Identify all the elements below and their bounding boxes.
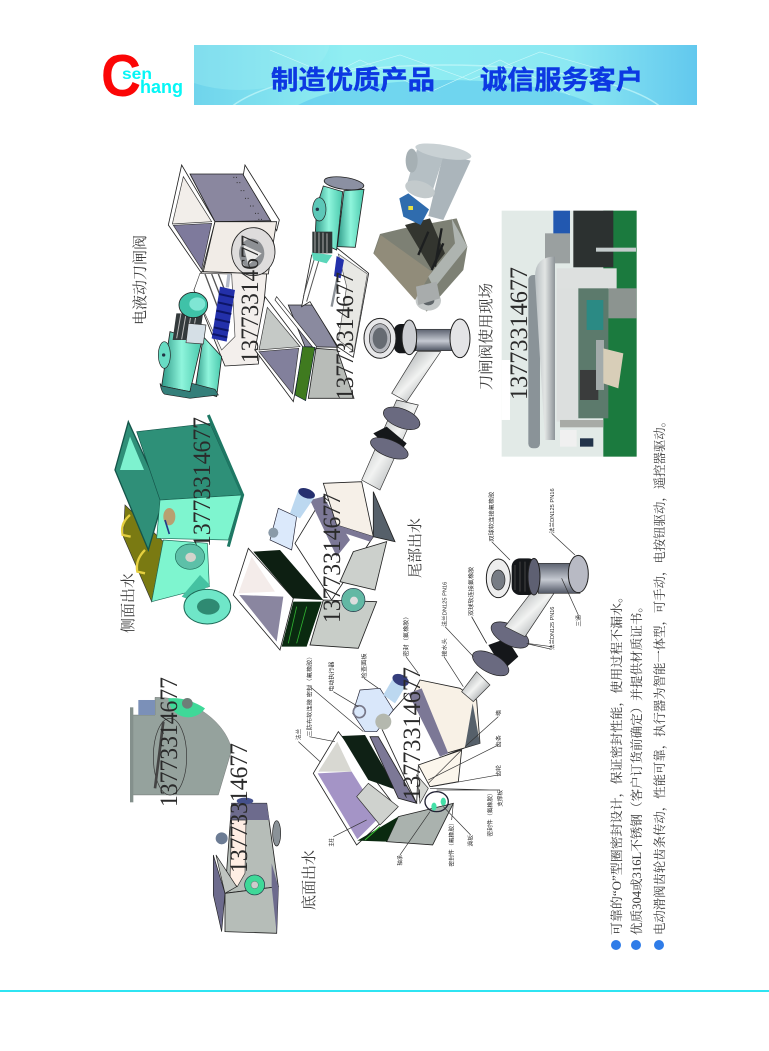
logo letter C: C bbox=[101, 43, 141, 109]
part labels: 密封件（氟橡胶） bbox=[448, 820, 456, 867]
panel: electro-hydraulic valves bbox=[158, 165, 369, 402]
panel: bottom outlet valve bbox=[130, 697, 281, 933]
phone watermarks: 13773314677 bbox=[226, 743, 253, 873]
labels: 法兰DN125 PN16 bbox=[548, 607, 556, 650]
part labels: 齿条 bbox=[494, 735, 502, 747]
phone watermarks: 13773314677 bbox=[237, 235, 264, 363]
phone watermarks: 13773314677 bbox=[319, 493, 346, 623]
section label: bottom outlet: 底面出水 bbox=[300, 850, 318, 910]
section label: tail outlet: 尾部出水 bbox=[407, 518, 424, 578]
labels: 接水头 bbox=[440, 638, 448, 657]
feature one: 可靠的“O”型圈密封设计，保证密封性能，使用过程不漏水。 bbox=[609, 590, 624, 935]
phone watermarks: 13773314677 bbox=[189, 417, 216, 547]
section label: site photo: 刀闸阀使用现场 bbox=[478, 283, 495, 390]
phone watermarks: 13773314677 bbox=[156, 677, 183, 807]
T pipe with bellows bbox=[364, 318, 470, 402]
valve one bbox=[158, 165, 279, 398]
slogan left: 制造优质产品 bbox=[271, 65, 435, 95]
part labels: 三防布软连接 密封（氟橡胶） bbox=[305, 653, 313, 737]
logo text hang: hang bbox=[140, 77, 183, 97]
section label: electro-hydraulic valve: 电液动刀闸阀 bbox=[131, 235, 149, 325]
panel: site photo bbox=[502, 211, 637, 457]
valve two bbox=[255, 175, 369, 402]
panel: side outlet valve bbox=[115, 415, 243, 624]
logo text sen: sen bbox=[122, 66, 152, 83]
phone watermarks: 13773314677 bbox=[506, 267, 533, 400]
leader lines bbox=[445, 533, 578, 657]
side section view bbox=[130, 697, 232, 802]
panel: outlet T pipe with labels bbox=[440, 488, 588, 657]
part labels: 检查面板 bbox=[360, 653, 368, 678]
footer line bbox=[0, 990, 769, 992]
feature list bbox=[609, 415, 667, 950]
part labels: 主柱 bbox=[328, 838, 336, 847]
T pipe bbox=[486, 555, 588, 637]
slogan right: 诚信服务客户 bbox=[480, 65, 643, 95]
part labels: 密封（氟橡胶） bbox=[402, 613, 410, 657]
phone watermarks bbox=[156, 235, 533, 873]
labels: 双球软连接氟橡胶 bbox=[467, 566, 475, 616]
motor actuator photo bbox=[373, 140, 472, 312]
feature three: 电动滑阀齿轮齿条传动，性能可靠，执行器为智能一体型，可手动，电按钮驱动，遥控器驱动。 bbox=[652, 415, 667, 935]
part labels bbox=[295, 613, 504, 867]
panel: motor actuator photo and T pipe bbox=[364, 140, 472, 402]
part labels: 轴承 bbox=[396, 855, 404, 866]
part labels: 电动执行器 bbox=[327, 661, 335, 692]
section label: side outlet: 侧面出水 bbox=[120, 573, 137, 633]
labels bbox=[440, 488, 583, 657]
labels: 法兰DN125 PN16 bbox=[440, 582, 448, 627]
labels: 双球软连接氟橡胶 bbox=[487, 491, 495, 542]
part labels: 密封件（氟橡胶） bbox=[486, 790, 494, 837]
labels: 法兰DN125 PN16 bbox=[548, 488, 556, 533]
part labels: 支撑板 bbox=[496, 790, 504, 807]
phone watermarks: 13773314677 bbox=[332, 272, 359, 400]
slogan banner bbox=[194, 45, 697, 105]
labels: 三通 bbox=[575, 615, 583, 627]
leader lines bbox=[298, 617, 552, 855]
isometric view bbox=[213, 798, 281, 933]
phone watermarks: 13773314677 bbox=[399, 667, 426, 800]
logo bbox=[101, 43, 183, 109]
part labels: 墙 bbox=[494, 710, 502, 716]
part labels: 滑板 bbox=[467, 835, 475, 847]
feature two: 优质304或316L不锈钢（客户订货前确定）并提供材质证书。 bbox=[629, 600, 644, 935]
part labels: 齿轮 bbox=[494, 765, 502, 777]
panel: tail outlet valve bbox=[233, 400, 423, 650]
panel: exploded diagram bbox=[295, 587, 558, 867]
part labels: 法兰 bbox=[295, 728, 303, 740]
